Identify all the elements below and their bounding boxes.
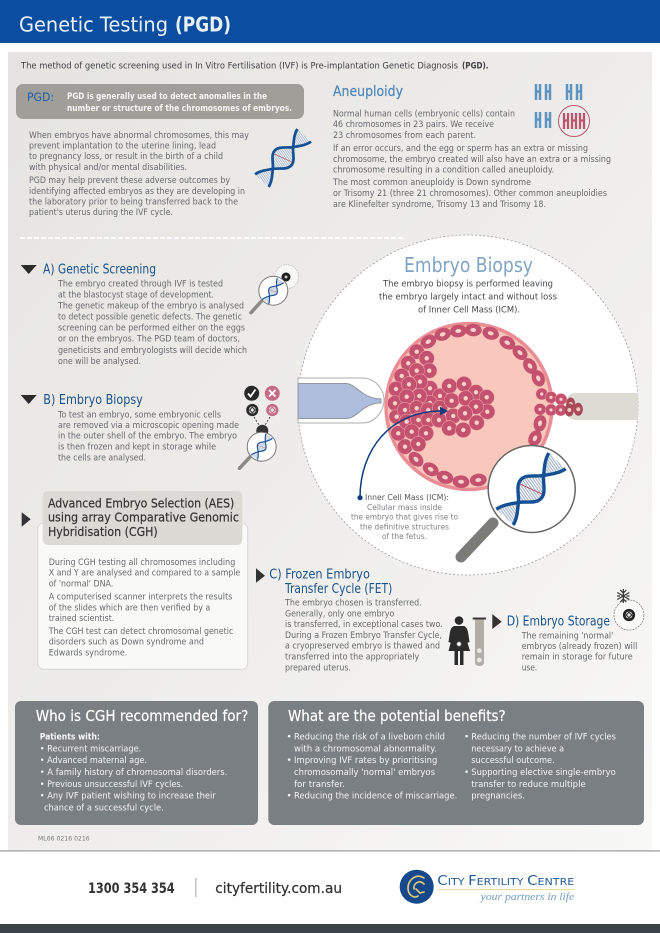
icon: DNA helix: [254, 128, 312, 188]
section C: frozen embryo transfer: [256, 568, 443, 673]
panel: embryo biopsy circle: [298, 235, 638, 575]
dashed divider: [20, 237, 404, 239]
text block: A: The embryo created through IVF is tested: [57, 280, 223, 290]
inner cell mass caption: Cellular mass inside: [367, 502, 442, 512]
benefits column 1: for transfer.: [294, 780, 345, 790]
biopsy description: [379, 280, 557, 316]
AES body text: During CGH testing all chromosomes including: [49, 558, 235, 568]
panel: PGD definition: PGD:: [27, 90, 54, 104]
footer logo: [400, 870, 574, 904]
text block: Aneuploidy explanation: are Klinefelter syndrome, Trisomy 13 and Trisomy 18.: [333, 200, 546, 210]
bottom dark strip: [0, 924, 660, 933]
magnifier with DNA: [461, 446, 575, 557]
document code: ML66 0216 0216: [38, 836, 90, 842]
biopsy description: The embryo biopsy is performed leaving: [382, 280, 553, 290]
AES heading: [48, 496, 239, 539]
text block: Aneuploidy explanation: 46 chromosomes in 23 pairs. We receive: [333, 120, 494, 130]
benefits column 1: •: [286, 756, 292, 766]
footer phone number: 1300 354 354: [88, 881, 175, 897]
text block: C: Generally, only one embryo: [285, 609, 394, 619]
patient list: • A family history of chromosomal disorders.: [40, 768, 227, 778]
panel: PGD definition: PGD is generally used to detect anomalies in the: [67, 92, 267, 102]
biopsied cells: [534, 388, 583, 416]
panel heading: What are the potential benefits?: [288, 707, 506, 725]
text block: PGD explanation: identifying affected embryos as they are developing in: [29, 187, 245, 197]
text block: Aneuploidy explanation: Normal human cells (embryonic cells) contain: [333, 110, 515, 120]
text block: A: screening can be performed either on the eggs: [58, 324, 245, 334]
text block: C: During a Frozen Embryo Transfer Cycle,: [285, 631, 442, 641]
inner cell mass caption: [351, 492, 458, 541]
icon: biopsy result check, cross and magnifier: [240, 386, 280, 468]
AES heading: Hybridisation (CGH): [48, 525, 158, 539]
patient list: • Any IVF patient wishing to increase their: [40, 792, 216, 802]
AES heading: using array Comparative Genomic: [48, 510, 239, 524]
intro sentence: The method of genetic screening used in In Vitro Fertilisation (IVF) is Pre-implantation Genetic Diagnosis: [20, 62, 458, 72]
benefits column 1: •: [286, 792, 292, 802]
patient list: [40, 732, 227, 814]
panel: Who is CGH recommended for: [15, 701, 258, 825]
section C: frozen embryo transfer: Transfer Cycle (FET): [284, 582, 392, 597]
AES body text: [48, 558, 240, 659]
footer logo: your partners in life: [480, 891, 574, 903]
text block: PGD explanation: prevent implantation to the uterine lining, lead: [29, 142, 216, 152]
inner cell mass cells: [387, 344, 495, 455]
AES body text: disorders such as Down syndrome and: [49, 638, 204, 648]
biopsy description: of Inner Cell Mass (ICM).: [418, 306, 520, 316]
trophectoderm cells: [406, 323, 548, 489]
inner cell mass caption: the embryo that gives rise to: [351, 512, 458, 522]
text block: Aneuploidy explanation: If an error occurs, and the egg or sperm has an extra or missing: [333, 144, 588, 154]
AES heading: Advanced Embryo Selection (AES): [48, 496, 234, 510]
footer rule: [0, 850, 660, 852]
panel heading: Who is CGH recommended for?: [36, 707, 248, 725]
text block: D: embryos (already frozen) will: [522, 642, 637, 652]
text block: A: at the blastocyst stage of development.: [58, 290, 214, 300]
benefits column 2: pregnancies.: [471, 792, 525, 802]
icon: test tube: [473, 618, 486, 666]
title: Genetic Testing: [19, 12, 168, 36]
section D: embryo storage: D) Embryo Storage: [507, 614, 610, 630]
inner cell mass caption: of the fetus.: [382, 531, 427, 541]
footer logo: CITY FERTILITY CENTRE: [437, 873, 574, 889]
benefits column 1: Improving IVF rates by prioritising: [294, 756, 437, 766]
benefits column 1: with a chromosomal abnormality.: [294, 744, 437, 754]
panel: potential benefits: [268, 701, 644, 825]
patient list: • Previous unsuccessful IVF cycles.: [40, 780, 183, 790]
patient list: chance of a successful cycle.: [44, 804, 164, 814]
benefits column 2: Supporting elective single-embryo: [471, 768, 616, 778]
text block: A: geneticists and embryologists will decide which: [58, 346, 247, 356]
AES body text: A computerised scanner interprets the results: [49, 593, 233, 603]
heading: Embryo Biopsy: Embryo Biopsy: [404, 253, 533, 277]
benefits column 2: Reducing the number of IVF cycles: [471, 732, 616, 742]
text block: A: one will be analysed.: [58, 357, 141, 367]
AES body text: trained scientist.: [49, 614, 114, 624]
benefits column 1: Reducing the risk of a liveborn child: [294, 732, 445, 742]
benefits column 1: [286, 732, 457, 802]
text block: PGD explanation: the laboratory prior to being transferred back to the: [29, 198, 238, 208]
AES body text: of the slides which are then verified by a: [49, 603, 210, 613]
panel: PGD definition: number or structure of the chromosomes of embryos.: [67, 104, 292, 114]
header band: [0, 0, 660, 43]
inner cell mass caption: the definitive structures: [360, 522, 449, 532]
text block: Aneuploidy explanation: 23 chromosomes from each parent.: [333, 131, 476, 141]
text block: Aneuploidy explanation: or Trisomy 21 (three 21 chromosomes). Other common aneuploidies: [333, 189, 607, 199]
section A: genetic screening: A) Genetic Screening: [43, 262, 156, 278]
benefits column 2: •: [464, 768, 469, 778]
AES body text: The CGH test can detect chromosomal genetic: [48, 627, 233, 637]
benefits column 2: transfer to reduce multiple: [471, 780, 586, 790]
benefits column 1: Reducing the incidence of miscarriage.: [294, 792, 457, 802]
icon: chromosome pairs and trisomy: [536, 84, 590, 136]
embryo: [386, 323, 583, 490]
section A: genetic screening: [21, 262, 247, 367]
panel: Advanced Embryo Selection: [22, 491, 248, 669]
text block: D: use.: [522, 663, 537, 673]
biopsy pipette: [566, 393, 638, 420]
icon: frozen embryo with snowflake: [614, 589, 644, 630]
benefits column 2: [464, 732, 616, 802]
text block: A: or on the embryos. The PGD team of doctors,: [58, 335, 240, 345]
arrow: inner cell mass pointer: [357, 406, 448, 500]
text block: A: to detect possible genetic defects. The genetic: [58, 313, 242, 323]
icon: woman silhouette: [448, 616, 470, 665]
text block: C: a cryopreserved embryo is thawed and: [285, 642, 440, 652]
benefits column 2: successful outcome.: [471, 756, 555, 766]
inner cell mass caption: Inner Cell Mass (ICM):: [365, 492, 449, 502]
text block: C: transferred into the appropriately: [285, 653, 419, 663]
section C: frozen embryo transfer: C) Frozen Embryo: [269, 568, 370, 582]
patient list: • Recurrent miscarriage.: [40, 744, 141, 754]
benefits column 2: necessary to achieve a: [471, 744, 564, 754]
text block: PGD explanation: When embryos have abnormal chromosomes, this may: [29, 131, 249, 141]
text block: A: [57, 280, 247, 367]
footer divider: [195, 878, 197, 897]
AES body text: Edwards syndrome.: [49, 649, 127, 659]
text block: Aneuploidy explanation: chromosome resulting in a condition called aneuploidy.: [333, 166, 554, 176]
section B: embryo biopsy: B) Embryo Biopsy: [43, 393, 143, 408]
AES body text: X and Y are analysed and compared to a sample: [49, 569, 240, 579]
holding pipette: [298, 378, 384, 423]
text block: B: the cells are analysed.: [58, 453, 146, 463]
heading: Aneuploidy: Aneuploidy: [333, 84, 403, 100]
patient list: • Advanced maternal age.: [40, 756, 147, 766]
benefits column 2: •: [464, 732, 469, 742]
benefits column 1: •: [286, 732, 292, 742]
text block: PGD explanation: with physical and/or mental disabilities.: [29, 163, 187, 173]
text block: D: remain in storage for future: [522, 653, 633, 663]
benefits column 1: chromosomally 'normal' embryos: [294, 768, 435, 778]
AES body text: of 'normal' DNA.: [49, 579, 113, 589]
text block: D: [521, 631, 637, 673]
text block: PGD explanation: PGD may help prevent these adverse outcomes by: [29, 176, 230, 186]
biopsy description: the embryo largely intact and without loss: [379, 292, 557, 302]
text block: PGD explanation: to pregnancy loss, or result in the birth of a child: [29, 152, 223, 162]
text block: B: in the outer shell of the embryo. The embryo: [58, 432, 237, 442]
text block: Aneuploidy explanation: chromosome, the embryo created will also have an extra or a missing: [333, 155, 611, 165]
text block: Aneuploidy explanation: [332, 110, 611, 210]
text block: B: is then frozen and kept in storage while: [58, 443, 216, 453]
text block: Aneuploidy explanation: The most common aneuploidy is Down syndrome: [332, 178, 531, 188]
text block: B: are removed via a microscopic opening made: [58, 421, 239, 431]
text block: PGD explanation: [29, 131, 249, 218]
text block: D: The remaining 'normal': [521, 631, 613, 641]
text block: C: [284, 599, 443, 673]
footer website: cityfertility.com.au: [215, 881, 342, 897]
section D: embryo storage: [492, 614, 637, 673]
section B: embryo biopsy: [21, 393, 239, 463]
title: (PGD): [175, 12, 231, 36]
text block: B: To test an embryo, some embryonic cells: [57, 410, 221, 420]
text block: C: The embryo chosen is transferred.: [284, 599, 422, 609]
text block: A: The genetic makeup of the embryo is analysed: [57, 302, 244, 312]
intro sentence: (PGD).: [462, 62, 488, 72]
text block: B: [57, 410, 239, 463]
icon: magnifier screening: [251, 265, 299, 313]
text block: C: is transferred, in exceptional cases two.: [285, 620, 443, 630]
text block: C: prepared uterus.: [285, 663, 351, 673]
text block: PGD explanation: patient's uterus during the IVF cycle.: [29, 208, 173, 218]
panel: PGD definition: [16, 84, 304, 119]
patient list: Patients with:: [40, 732, 100, 742]
